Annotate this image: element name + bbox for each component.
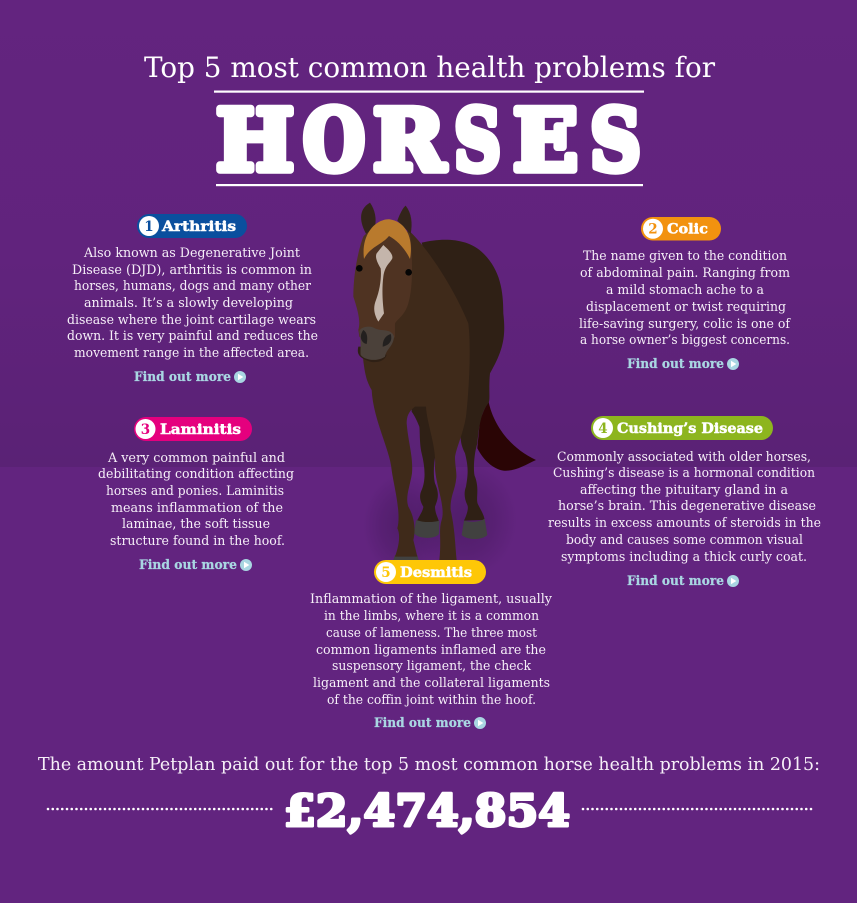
body text: Also known as Degenerative Joint [83,245,300,260]
footer caption: The amount Petplan paid out for the top 5 most common horse health problems in 2015: [38,754,820,775]
horse far foreleg [412,403,439,523]
dotted line right [583,808,812,810]
panel: 4 Cushing's Disease [548,416,821,588]
title: HORSES: R [373,91,446,190]
dotted line left [48,808,275,810]
body text: animals. It’s a slowly developing [84,295,293,310]
body text: in the limbs, where it is a common [324,608,539,623]
body text: a mild stomach ache to a [606,282,764,297]
body text: of the coffin joint within the hoof. [327,692,536,707]
floor shadow beneath horse [363,462,517,578]
label pill: Colic: 2 [648,222,658,238]
body text: Cushing’s disease is a hormonal condition [553,465,815,480]
label pill: Arthritis [137,214,247,238]
body text: body and causes some common visual [566,532,803,547]
panel: 3 Laminitis [98,417,294,572]
label pill: Cushing's Disease [591,416,773,440]
body text: down. It is very painful and reduces the [67,328,318,343]
body text: horses, humans, dogs and many other [74,278,312,293]
label pill: Cushing's Disease: 4 [598,421,608,437]
horse forelock [364,219,411,259]
label pill: Laminitis [134,417,252,441]
title rule bottom [216,184,643,186]
horse hooves [393,519,487,560]
label pill: Laminitis: Laminitis [160,422,241,438]
body text: structure found in the hoof. [110,533,285,548]
horse rear body and legs [422,240,504,521]
link: find out more: Find out more [139,557,237,572]
horse ears [361,203,412,235]
title: HORSES: S [590,91,641,190]
body text [548,449,821,564]
body text: Inflammation of the ligament, usually [310,591,553,606]
link: find out more: Find out more [627,356,724,371]
title: HORSES: H [216,91,294,190]
label pill: Arthritis: 1 [144,219,154,235]
label pill: Colic: Colic [667,222,708,238]
panel: 1 Arthritis [67,214,318,384]
link: find out more: Find out more [374,715,471,730]
label pill: Desmitis: Desmitis [400,565,472,581]
body text: Commonly associated with older horses, [557,449,811,464]
label pill: Desmitis [374,560,486,584]
label pill: Colic [641,217,721,240]
body text: disease where the joint cartilage wears [67,312,316,327]
body text: debilitating condition affecting [98,466,294,481]
body text: of abdominal pain. Ranging from [580,265,790,280]
title rule top [214,90,644,93]
label pill: Laminitis: 3 [141,422,150,438]
horse tail [477,400,536,471]
body text: horses and ponies. Laminitis [106,483,284,498]
body text: A very common painful and [107,450,285,465]
body text: cause of lameness. The three most [326,625,537,640]
label pill: Cushing's Disease: Cushing’s Disease [617,421,763,437]
body text: displacement or twist requiring [586,299,786,314]
horse nostrils [361,330,391,347]
panel: 2 Colic [579,217,791,371]
body text: laminae, the soft tissue [122,516,270,531]
label pill: Desmitis: 5 [381,565,391,581]
total amount: £2,474,854 [284,786,570,837]
body text [67,245,318,360]
horse head [353,227,412,344]
title: HORSES: O [303,91,365,190]
body text: The name given to the condition [583,248,787,263]
body text: a horse owner’s biggest concerns. [580,332,790,347]
body text [310,591,553,707]
horse blaze [374,245,392,322]
link: find out more: Find out more [134,369,231,384]
body text: means inflammation of the [111,500,283,515]
illustration: horse [353,203,536,560]
title: HORSES [216,91,641,190]
body text: symptoms including a thick curly coat. [561,549,807,564]
title: top line: Top 5 most common health problems for [144,51,716,84]
body text [98,450,294,548]
horse muzzle [358,347,387,362]
body text: life-saving surgery, colic is one of [579,316,791,331]
horse neck, chest and near forelegs [360,230,470,560]
body text: affecting the pituitary gland in a [580,482,788,497]
title: HORSES: S [454,91,501,190]
horse eyes [356,265,412,276]
title: HORSES: E [513,91,578,190]
panel: 5 Desmitis [310,560,553,730]
body text: suspensory ligament, the check [332,658,531,673]
link: find out more: Find out more [627,573,724,588]
body text: horse’s brain. This degenerative disease [558,498,816,513]
body text: results in excess amounts of steroids in the [548,515,821,530]
body text: common ligaments inflamed are the [316,642,546,657]
body text: Disease (DJD), arthritis is common in [72,262,312,277]
label pill: Arthritis: Arthritis [161,219,236,235]
body text [579,248,791,347]
body text: ligament and the collateral ligaments [313,675,550,690]
body text: movement range in the affected area. [74,345,309,360]
